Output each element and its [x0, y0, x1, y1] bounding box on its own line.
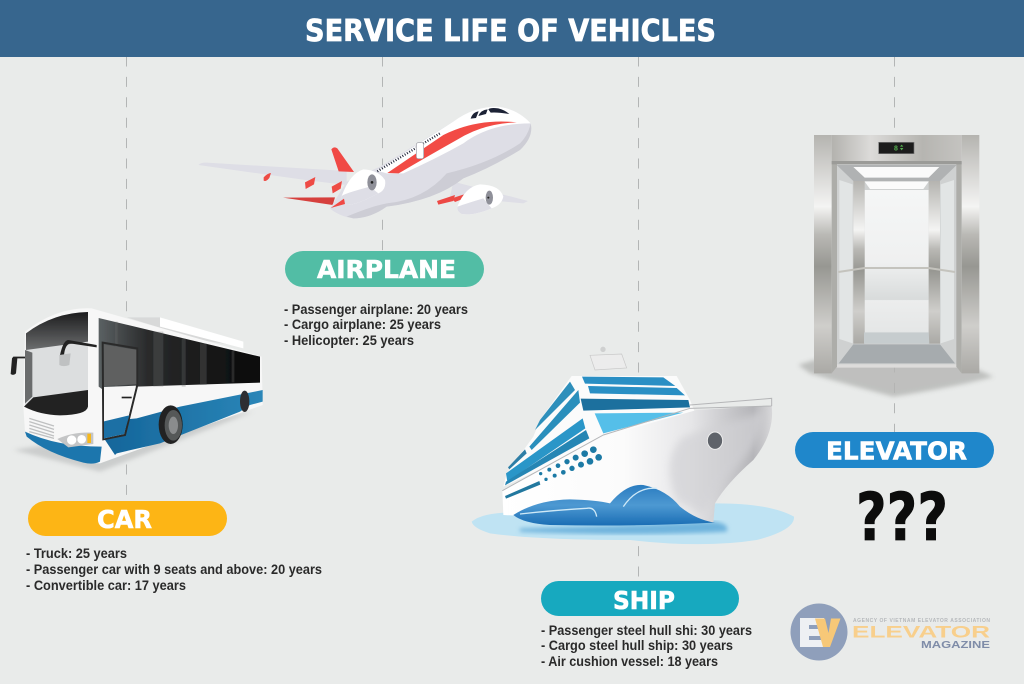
nose tail red tip: [331, 199, 345, 208]
superstructure: [503, 376, 697, 487]
hull railing: [502, 398, 772, 491]
wave highlights: [520, 488, 657, 517]
car list: - Convertible car: 17 years: [26, 578, 186, 593]
dashboard: [24, 390, 88, 415]
fuselage white top: [377, 107, 531, 173]
fuselage: [330, 107, 531, 218]
cabin interior: [837, 163, 957, 367]
logo letter V: [815, 618, 840, 647]
hull shading: [670, 412, 763, 513]
side windows: [99, 318, 260, 390]
floor shadow: [798, 360, 993, 397]
logo circle: [790, 604, 848, 660]
elevator label pill: ELEVATOR: [826, 436, 967, 466]
left door frame: [814, 135, 832, 373]
airplane label pill: [285, 251, 484, 287]
title: SERVICE LIFE OF VEHICLES: [305, 14, 716, 49]
window streaks: [115, 322, 234, 387]
front blue bumper: [25, 432, 102, 464]
right door frame: [962, 135, 979, 373]
floor indicator: [879, 142, 914, 154]
bus shadow: [13, 412, 253, 472]
logo letter E: [800, 618, 825, 647]
tail fin: [331, 147, 354, 172]
hull: [502, 406, 772, 523]
near wing: [450, 182, 528, 203]
ship label pill: SHIP: [613, 586, 675, 615]
header banner: [0, 0, 1024, 57]
question marks: ???: [856, 479, 948, 556]
lower window slot: [505, 481, 540, 499]
airplane list: - Cargo airplane: 25 years: [284, 317, 441, 332]
ship illustration: [472, 347, 794, 544]
deck windows: [505, 377, 690, 485]
ship list: - Air cushion vessel: 18 years: [541, 654, 718, 669]
roof unit: [127, 317, 243, 347]
front grille: [29, 418, 54, 438]
right engine flaps: [437, 194, 464, 205]
ceiling: [837, 165, 957, 181]
airplane label pill: AIRPLANE: [317, 255, 456, 284]
wing flaps: [264, 173, 342, 193]
car list: [26, 546, 322, 593]
blue lower band: [103, 390, 263, 455]
airplane list: - Helicopter: 25 years: [284, 333, 414, 348]
bus illustration: [11, 308, 263, 472]
logo: [790, 604, 990, 660]
headlights: [57, 433, 93, 447]
red stripe: [387, 122, 517, 173]
cabin windows: [377, 133, 440, 171]
floor indicator: 8: [894, 146, 898, 153]
inner columns: [853, 181, 865, 344]
wave: [513, 485, 715, 525]
back wall: [865, 190, 929, 333]
rear wheel: [240, 391, 249, 412]
cabin door: [416, 143, 424, 159]
car list: - Passenger car with 9 seats and above: 20 years: [26, 562, 322, 577]
fuselage shadow: [347, 123, 531, 218]
left engine: [342, 169, 385, 205]
porthole large: [707, 432, 723, 449]
logo tagline: AGENCY OF VIETNAM ELEVATOR ASSOCIATION: [853, 618, 990, 624]
floor: [864, 332, 929, 344]
windshield: [25, 312, 88, 407]
ship label pill: [541, 581, 739, 616]
handrail: [838, 268, 955, 272]
airplane list: [284, 302, 468, 348]
tail plane: [283, 197, 335, 205]
logo name: ELEVATOR: [852, 622, 990, 642]
side panels: [839, 180, 853, 343]
ship list: [541, 623, 752, 669]
water pool: [472, 503, 794, 544]
bus body: [23, 308, 263, 463]
elevator label pill: [795, 432, 994, 468]
car label pill: CAR: [97, 505, 152, 534]
mirrors: [11, 357, 25, 375]
lintel: [832, 135, 962, 162]
ship list: - Cargo steel hull ship: 30 years: [541, 638, 733, 653]
cockpit windows: [471, 108, 509, 119]
airplane list: - Passenger airplane: 20 years: [284, 302, 468, 317]
far wing: [198, 163, 347, 185]
ship list: - Passenger steel hull shi: 30 years: [541, 623, 752, 638]
car list: - Truck: 25 years: [26, 546, 127, 561]
dashed guide lines: [126, 56, 894, 581]
right engine: [457, 184, 503, 214]
roof highlight: [160, 317, 243, 348]
airplane illustration: [198, 107, 531, 218]
round windows: [539, 446, 602, 481]
elevator illustration: [798, 135, 993, 397]
car label pill: [28, 501, 227, 536]
door: [103, 343, 137, 439]
radar mast: [590, 347, 627, 370]
logo magazine: MAGAZINE: [921, 640, 990, 651]
front wheel: [159, 405, 183, 444]
